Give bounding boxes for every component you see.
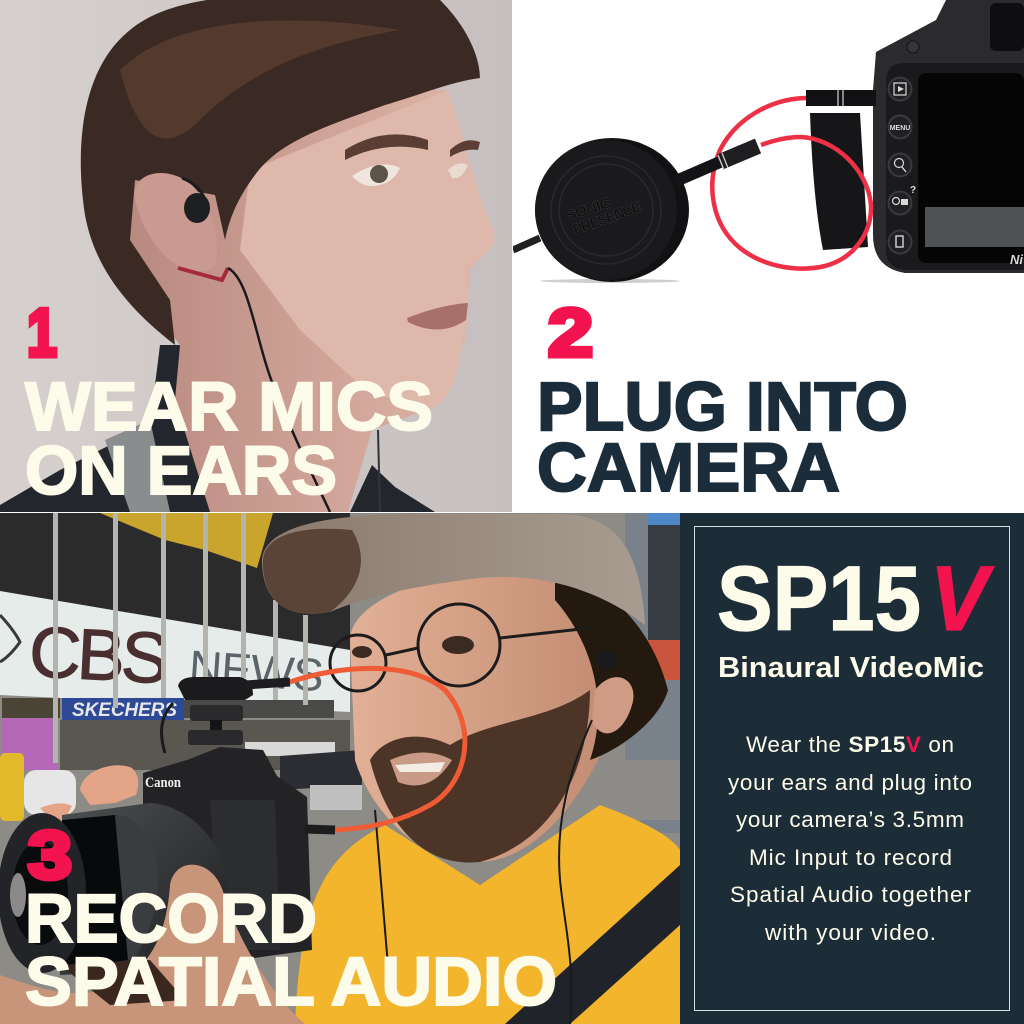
product title SP15V: SP15	[717, 548, 921, 650]
product subtitle: Binaural VideoMic	[718, 652, 984, 684]
heading: record spatial audio: SPATIAL AUDIO	[25, 943, 557, 1020]
step number 1: 1	[27, 295, 57, 371]
step number 3: 3	[28, 817, 72, 893]
panel: step 2 plug into camera	[513, 0, 1024, 512]
heading: record spatial audio: RECORD	[25, 880, 317, 957]
camera side flap	[810, 113, 868, 250]
sign text: CBS	[27, 612, 171, 699]
product description: Mic Input to record	[749, 845, 952, 870]
hand holding camera	[0, 865, 305, 1024]
lens	[60, 803, 227, 975]
heading: plug into camera: CAMERA	[537, 429, 840, 506]
photo: street scene background: SKECHERS	[72, 700, 177, 721]
microphone hub	[535, 138, 689, 282]
red cable loop	[712, 98, 871, 269]
glasses and cables	[290, 604, 592, 1024]
photo: camera back with microphone hub and red cable: SONIC	[564, 194, 613, 225]
product description	[728, 732, 972, 945]
photo: street scene background	[0, 513, 680, 833]
panel: step 3 record spatial audio	[0, 513, 680, 1024]
product description: your ears and plug into	[728, 770, 972, 795]
product title SP15V: V	[930, 548, 994, 650]
photo: camera back with microphone hub and red cable: PRESENCE	[571, 198, 644, 239]
product description: with your video.	[764, 920, 936, 945]
camera brand: Canon	[145, 775, 182, 791]
heading: wear mics on ears	[24, 380, 432, 496]
sign text: NEWS	[187, 640, 326, 701]
heading: plug into camera: PLUG INTO	[537, 368, 908, 445]
panel: SP15V product description	[680, 513, 1024, 1024]
photo: man in cap and yellow shirt	[262, 514, 680, 1024]
photo: camera back with microphone hub and red cable: Ni	[1010, 252, 1023, 267]
product description: Spatial Audio together	[730, 882, 972, 907]
heading: record spatial audio	[26, 892, 556, 1006]
heading: wear mics on ears: ON EARS	[25, 432, 337, 509]
camera body	[873, 0, 1024, 273]
sign text	[0, 614, 322, 691]
heading: plug into camera	[538, 380, 906, 492]
product description: Wear the SP15V on	[746, 732, 954, 757]
photo: camera back with microphone hub and red cable: ?	[910, 185, 916, 196]
photo: mirrorless camera with mic hub	[0, 677, 335, 1024]
camera buttons	[888, 78, 912, 254]
photo: man in profile wearing ear mics	[0, 0, 495, 512]
panel: step 1 wear mics on ears	[0, 0, 512, 512]
step number 2: 2	[548, 295, 593, 371]
connector to camera	[806, 90, 876, 106]
product description: your camera’s 3.5mm	[736, 807, 964, 832]
photo: camera back with microphone hub and red cable: MENU	[890, 125, 910, 132]
heading: wear mics on ears: WEAR MICS	[25, 368, 433, 445]
photo: camera back with microphone hub and red cable	[513, 0, 1024, 283]
